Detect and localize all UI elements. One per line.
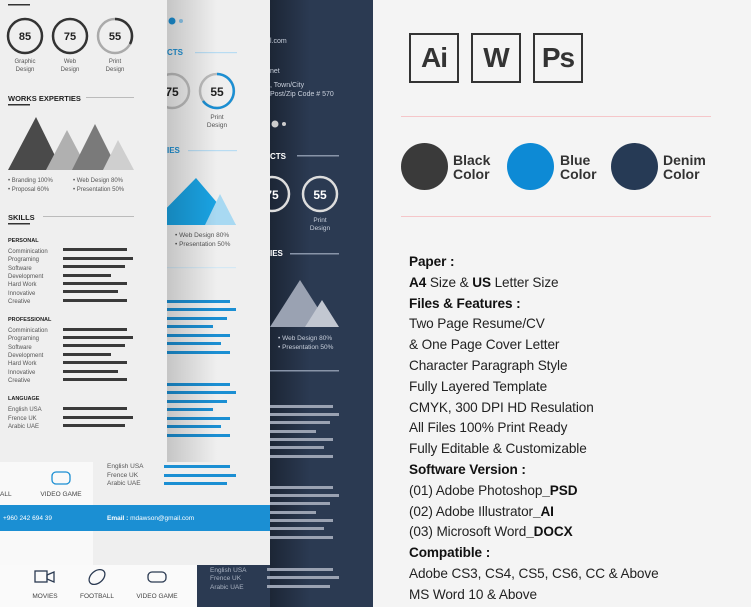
dark page: Post/Zip Code # 570 xyxy=(270,91,334,98)
mockup: resume pages xyxy=(0,0,373,607)
blue page: Design xyxy=(207,122,228,129)
gray page: English USA xyxy=(8,407,42,413)
gray page: Innovative xyxy=(8,291,36,297)
features list: Fully Editable & Customizable xyxy=(409,441,587,456)
blue page: • Presentation 50% xyxy=(175,241,231,248)
dark page: CTS xyxy=(270,152,287,161)
features list: CMYK, 300 DPI HD Resulation xyxy=(409,400,594,415)
gray page: Programing xyxy=(8,257,39,263)
label: black xyxy=(453,152,490,182)
dark page xyxy=(197,0,373,607)
label: denim xyxy=(663,152,706,182)
dark page: , Town/City xyxy=(270,82,305,89)
gray page: Development xyxy=(8,353,44,359)
dark page: • Presentation 50% xyxy=(278,344,334,351)
gray page: Design xyxy=(61,67,79,73)
blue page: Print xyxy=(210,114,224,121)
blue page: IES xyxy=(167,146,181,155)
dark page: 55 xyxy=(313,188,327,202)
swatch: denim xyxy=(611,143,658,190)
icon: Ai: Ai xyxy=(421,42,447,73)
dark page: net xyxy=(270,68,280,75)
gray page: • Proposal 60% xyxy=(8,187,50,193)
dark page: l.com xyxy=(270,38,287,45)
icon: W: W xyxy=(483,42,509,73)
gray page: 75 xyxy=(64,31,76,43)
features list: (03) Microsoft Word_DOCX xyxy=(409,524,573,539)
gray page xyxy=(0,0,167,462)
features list: Character Paragraph Style xyxy=(409,358,567,373)
blue page: +960 242 694 39 xyxy=(3,515,52,522)
label: black: Black xyxy=(453,152,490,168)
gray page: Web xyxy=(64,59,77,65)
features list: Two Page Resume/CV xyxy=(409,316,545,331)
divider top xyxy=(401,116,711,117)
gray page: • Presentation 50% xyxy=(73,187,125,193)
gray page: SKILLS xyxy=(8,213,35,222)
gray page: Arabic UAE xyxy=(8,424,39,430)
features list: & One Page Cover Letter xyxy=(409,337,559,352)
blue page: English USA xyxy=(107,463,144,470)
gray page: Creative xyxy=(8,378,31,384)
icon: Ps: Ps xyxy=(542,42,574,73)
blue page: Email : mdawson@gmail.com xyxy=(107,515,194,522)
gray page: Creative xyxy=(8,299,31,305)
gray page: Software xyxy=(8,345,32,351)
label: denim: Color xyxy=(663,166,700,182)
dark page: Arabic UAE xyxy=(210,584,244,591)
gray page: WORKS EXPERTIES xyxy=(8,94,81,103)
dark page: English USA xyxy=(210,567,247,574)
gray page: 85 xyxy=(19,31,31,43)
blue page: 75 xyxy=(165,85,179,99)
features list: All Files 100% Print Ready xyxy=(409,420,567,435)
icon: Ps xyxy=(533,33,583,83)
gray page: PROFESSIONAL xyxy=(8,317,52,323)
dark page: Frence UK xyxy=(210,575,242,582)
blue page: • Web Design 80% xyxy=(175,232,229,239)
bottom white page: FOOTBALL xyxy=(80,593,114,600)
features list: A4 Size & US Letter Size xyxy=(409,275,558,290)
blue page: Frence UK xyxy=(107,472,139,479)
features list: Adobe CS3, CS4, CS5, CS6, CC & Above xyxy=(409,566,659,581)
gray page: Programing xyxy=(8,336,39,342)
gray page: Design xyxy=(16,67,34,73)
label: black: Color xyxy=(453,166,490,182)
dark page: 75 xyxy=(265,188,279,202)
gray page: Frence UK xyxy=(8,416,37,422)
features list: Software Version : xyxy=(409,462,526,477)
swatch: black xyxy=(401,143,448,190)
dark page: Design xyxy=(310,225,331,232)
label: blue: Color xyxy=(560,166,597,182)
gray page: PERSONAL xyxy=(8,238,39,244)
features list: MS Word 10 & Above xyxy=(409,587,537,602)
blue page: VIDEO GAME xyxy=(40,491,82,498)
blue page: ALL xyxy=(0,491,12,498)
features list: (01) Adobe Photoshop_PSD xyxy=(409,483,577,498)
dark page: IES xyxy=(270,249,284,258)
blue page: CTS xyxy=(167,48,184,57)
bottom white page: MOVIES xyxy=(32,593,58,600)
gray page: Innovative xyxy=(8,370,36,376)
bottom white page xyxy=(0,562,197,607)
features list: (02) Adobe Illustrator_AI xyxy=(409,504,554,519)
features list: Fully Layered Template xyxy=(409,379,547,394)
label: blue: Blue xyxy=(560,152,590,168)
gray page: Comminication xyxy=(8,249,48,255)
dark page: • Web Design 80% xyxy=(278,335,332,342)
gray page: • Web Design 80% xyxy=(73,178,124,184)
divider bottom xyxy=(401,216,711,217)
gray page: Development xyxy=(8,274,44,280)
features list: Files & Features : xyxy=(409,296,521,311)
blue page: 55 xyxy=(210,85,224,99)
label: blue xyxy=(560,152,597,182)
gray page: LANGUAGE xyxy=(8,396,40,402)
features list: Paper : xyxy=(409,254,454,269)
features list xyxy=(409,254,659,602)
icon: W xyxy=(471,33,521,83)
gray page: Hard Work xyxy=(8,282,38,288)
gray page: 55 xyxy=(109,31,121,43)
gray page: Software xyxy=(8,266,32,272)
gray page: Design xyxy=(106,67,124,73)
gray page: Hard Work xyxy=(8,361,38,367)
gray page: Print xyxy=(109,59,121,65)
blue page xyxy=(0,0,270,565)
swatch: blue xyxy=(507,143,554,190)
icon: Ai xyxy=(409,33,459,83)
label: denim: Denim xyxy=(663,152,706,168)
gray page: Comminication xyxy=(8,328,48,334)
bottom white page: VIDEO GAME xyxy=(136,593,178,600)
gray page: • Branding 100% xyxy=(8,178,53,184)
dark page: Print xyxy=(313,217,327,224)
features list: Compatible : xyxy=(409,545,490,560)
gray page: Graphic xyxy=(14,59,36,65)
blue page: Arabic UAE xyxy=(107,480,141,487)
